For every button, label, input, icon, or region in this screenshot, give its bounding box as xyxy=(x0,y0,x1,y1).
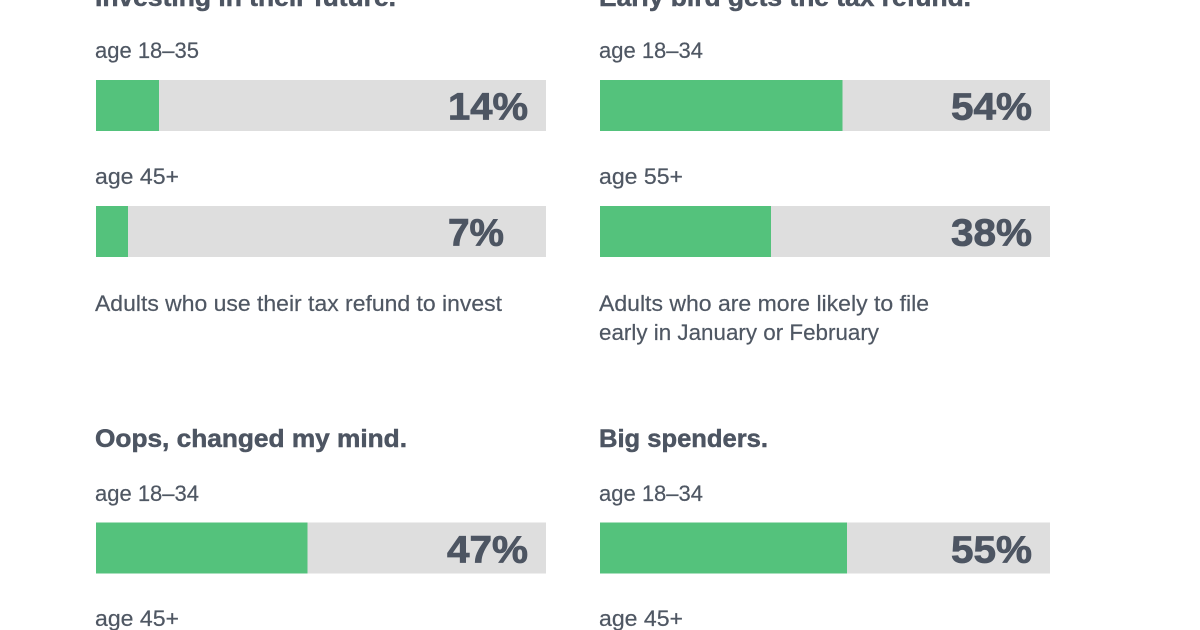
bar: big spenders age 18-34, 55% xyxy=(600,522,1050,574)
panel: oops, changed my mind xyxy=(95,425,546,630)
caption: early bird xyxy=(599,291,929,345)
label: age 18-34: age 18–34 xyxy=(599,38,703,63)
bar: early bird age 18-34, 54% xyxy=(600,80,1050,131)
panel: big spenders xyxy=(599,425,1050,630)
bar: early bird age 55+, 38%: 38% xyxy=(951,212,1032,254)
bar: investing age 45+, 7%: 7% xyxy=(448,212,504,254)
caption: early bird: Adults who are more likely to file xyxy=(599,291,929,316)
heading: big spenders: Big spenders. xyxy=(599,425,768,453)
caption: investing: Adults who use their tax refund to invest xyxy=(95,291,502,316)
label: age 55+: age 55+ xyxy=(599,164,683,189)
bar: oops age 18-34, 47%: 47% xyxy=(447,530,528,572)
panel: investing in their future xyxy=(95,0,546,316)
label: age 18-35: age 18–35 xyxy=(95,38,199,63)
bar: oops age 18-34, 47% xyxy=(96,522,546,574)
label: age 45+: age 45+ xyxy=(95,164,179,189)
bar: investing age 18-35, 14% xyxy=(96,80,546,131)
heading: oops: Oops, changed my mind. xyxy=(95,425,407,453)
panel: early bird xyxy=(599,0,1050,345)
caption: early bird: early in January or February xyxy=(599,320,879,345)
bar: investing age 18-35, 14%: 14% xyxy=(448,86,528,128)
label: age 18-34: age 18–34 xyxy=(95,481,199,506)
bar: early bird age 18-34, 54%: 54% xyxy=(951,86,1032,128)
bar: early bird age 55+, 38% xyxy=(600,206,1050,257)
label: age 18-34: age 18–34 xyxy=(599,481,703,506)
bar: big spenders age 18-34, 55%: 55% xyxy=(951,530,1032,572)
bar: investing age 45+, 7% xyxy=(96,206,546,257)
